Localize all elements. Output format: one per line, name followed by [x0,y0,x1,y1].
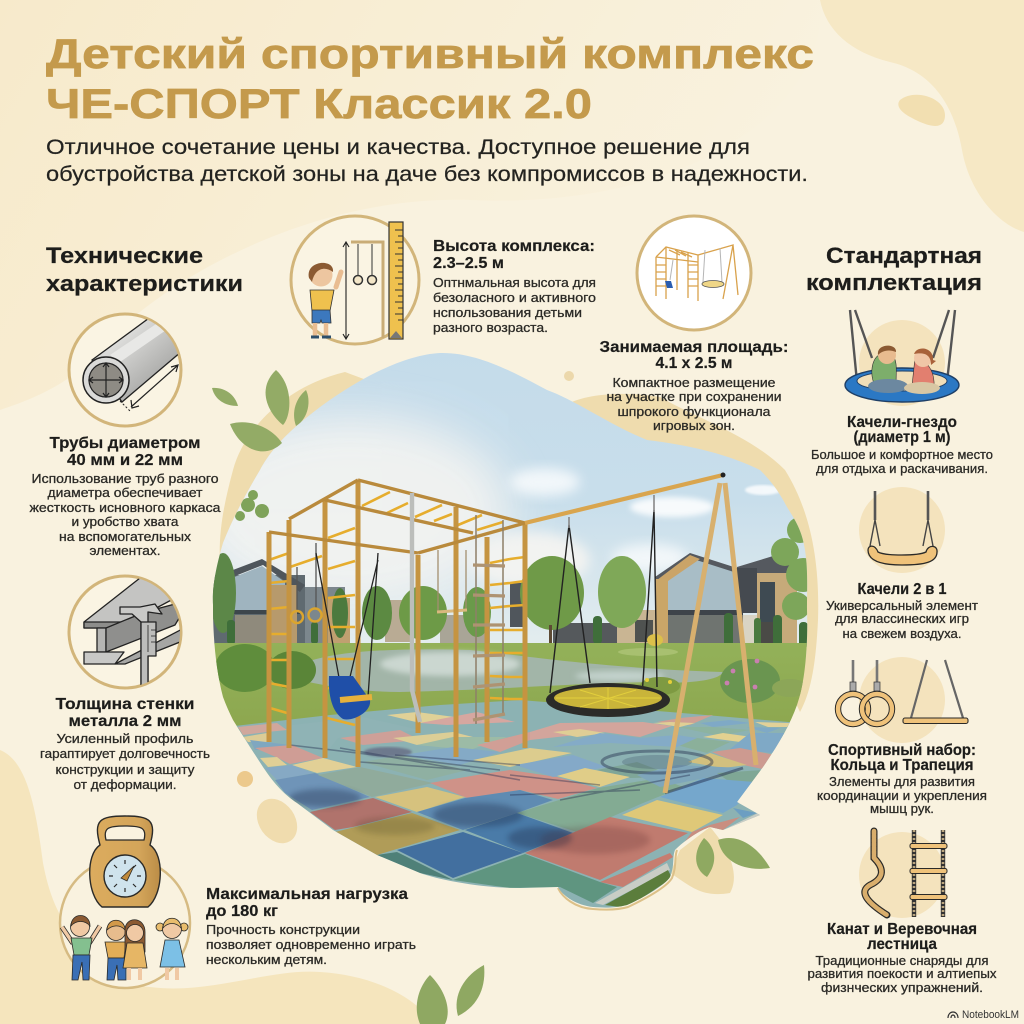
text: height: 2.3–2.5 м [433,255,504,272]
floor shadows [289,745,743,854]
text: max load: Максимальная нагрузка [206,886,408,903]
text: swing: для влассинеских игр [835,612,969,626]
trees [210,490,820,648]
text: occupied area: игровых зон. [653,419,735,433]
sky [220,353,808,660]
title: Детский спортивный комплекс [46,30,814,77]
floor tiles [238,712,790,908]
text: rope and ladder: Канат и Веревочная [827,921,977,938]
heading: technical characteristics: Технические [46,243,203,268]
kid 1 [62,916,100,980]
leaves lower right [696,838,770,877]
pond [300,649,723,692]
photo bottom outline [558,850,677,910]
panel: standard equipment [806,243,997,995]
text: sports set: координации и укрепления [817,789,987,803]
logo: NotebookLM: NotebookLM [962,1009,1019,1021]
leaves upper left [212,370,309,451]
icon: swing seat [859,487,945,573]
kid 2 [105,920,126,980]
text: pipes: Трубы диаметром [50,435,200,452]
text: pipes [30,435,221,558]
subtitle: обустройства детской зоны на даче без компромиссов в надежности. [46,163,808,186]
wooden poles and beams [269,472,756,793]
text: sports set: Кольца и Трапеция [830,757,974,774]
heading: technical characteristics [46,243,243,296]
text: max load [206,886,416,967]
text: nest swing [811,414,993,476]
heading: technical characteristics: характеристики [46,271,243,296]
text: wall thickness: конструкции и защиту [56,763,195,777]
text: swing: Качели 2 в 1 [858,581,947,598]
text: max load: до 180 кг [206,903,278,920]
text: pipes: жесткость исновного каркаса [30,501,221,515]
trapeze [437,550,467,612]
text: pipes: диаметра обеспечивает [48,486,203,500]
text: occupied area: Компактное размещение [612,376,776,390]
text: max load: нескольким детям. [206,953,327,967]
text: sports set [817,742,987,816]
text: wall thickness: гараптирует долговечность [40,747,210,761]
text: max load: Прочность конструкции [206,923,360,937]
text: sports set: Злементы для развития [829,775,975,789]
kid 3 [123,920,147,980]
text: swing: Укиверсальный элемент [826,599,978,613]
text: wall thickness: Толщина стенки [56,696,194,713]
rope ladder [473,515,505,724]
text: pipes: элементах. [90,544,160,558]
text: height: разного возраста. [433,321,548,335]
bushes and flowers [215,634,808,703]
grass [200,643,830,738]
icon: height with ruler [291,216,419,344]
text: wall thickness: от деформации. [74,778,176,792]
icon: pipe diameter [69,310,195,426]
kid 4 [156,918,188,980]
text: occupied area: Занимаемая площадь: [600,339,788,356]
text: height: Высота комплекса: [433,238,595,255]
text: wall thickness [40,696,210,792]
title [46,30,814,127]
leaves bottom [417,965,484,1024]
beige halo behind photo [220,372,818,894]
text: occupied area: шпрокого функционала [618,405,771,419]
text: rope and ladder: лестница [867,936,937,953]
text: rope and ladder [808,921,997,995]
text: height: нспользования детьми [433,306,582,320]
text: sports set: мышц рук. [870,802,934,816]
subtitle [46,136,808,186]
text: occupied area: на участке при сохранении [606,390,782,404]
title: ЧЕ-СПОРТ Классик 2.0 [46,80,592,127]
houses left [213,559,490,645]
subtitle: Отличное сочетание цены и качества. Доступное решение для [46,136,750,159]
heading: standard equipment [806,243,982,295]
text: wall thickness: Усиленный профиль [56,732,194,746]
text: nest swing: Качели-гнездо [847,414,957,431]
text: pipes: Использование труб разного [32,472,219,486]
text: nest swing: (диаметр 1 м) [854,429,950,446]
text: swing: на свежем воздуха. [842,627,962,641]
text: rope and ladder: физнческих упражнений. [821,981,983,995]
icon: nest swing [845,310,959,406]
toddler swing [316,553,378,720]
nest swing [546,495,670,717]
text: height [433,238,596,335]
heading: standard equipment: комплектация [806,270,982,295]
text: pipes: 40 мм и 22 мм [67,452,183,469]
clouds [190,415,781,605]
climbing frame [269,472,756,793]
icon: occupied area with complex [637,216,751,330]
text: height: безоласного и активного [433,291,596,305]
text: nest swing: для отдыха и раскачивания. [816,462,988,476]
text: pipes: и уробство хвата [72,515,179,529]
text: height: Оптнмальная высота для [433,276,596,290]
houses right [510,553,797,645]
text: nest swing: Большое и комфортное место [811,448,993,462]
rubber floor [226,700,800,915]
gym rings [291,543,322,623]
text: occupied area [600,339,788,433]
icon: kettlebell and kids [60,816,190,988]
text: occupied area: 4.1 х 2.5 м [656,355,732,372]
text: swing [826,581,978,641]
panel: technical specifications [30,243,416,988]
central photo of the playground [212,353,808,908]
text: sports set: Спортивный набор: [828,742,976,759]
text: max load: позволяет одновременно играть [206,938,416,952]
icon: wall thickness [69,576,190,690]
text: rope and ladder: развития поекости и алтиепых [808,967,997,981]
icon: rope and rope ladder [859,830,947,918]
text: wall thickness: металла 2 мм [68,713,182,730]
heading: standard equipment: Стандартная [826,243,982,268]
yellow rungs [269,492,525,725]
icon: rings and trapeze [838,657,968,743]
grey rope [412,493,420,722]
text: pipes: на вспомогательных [59,530,192,544]
text: rope and ladder: Традиционные снаряды для [816,954,988,968]
